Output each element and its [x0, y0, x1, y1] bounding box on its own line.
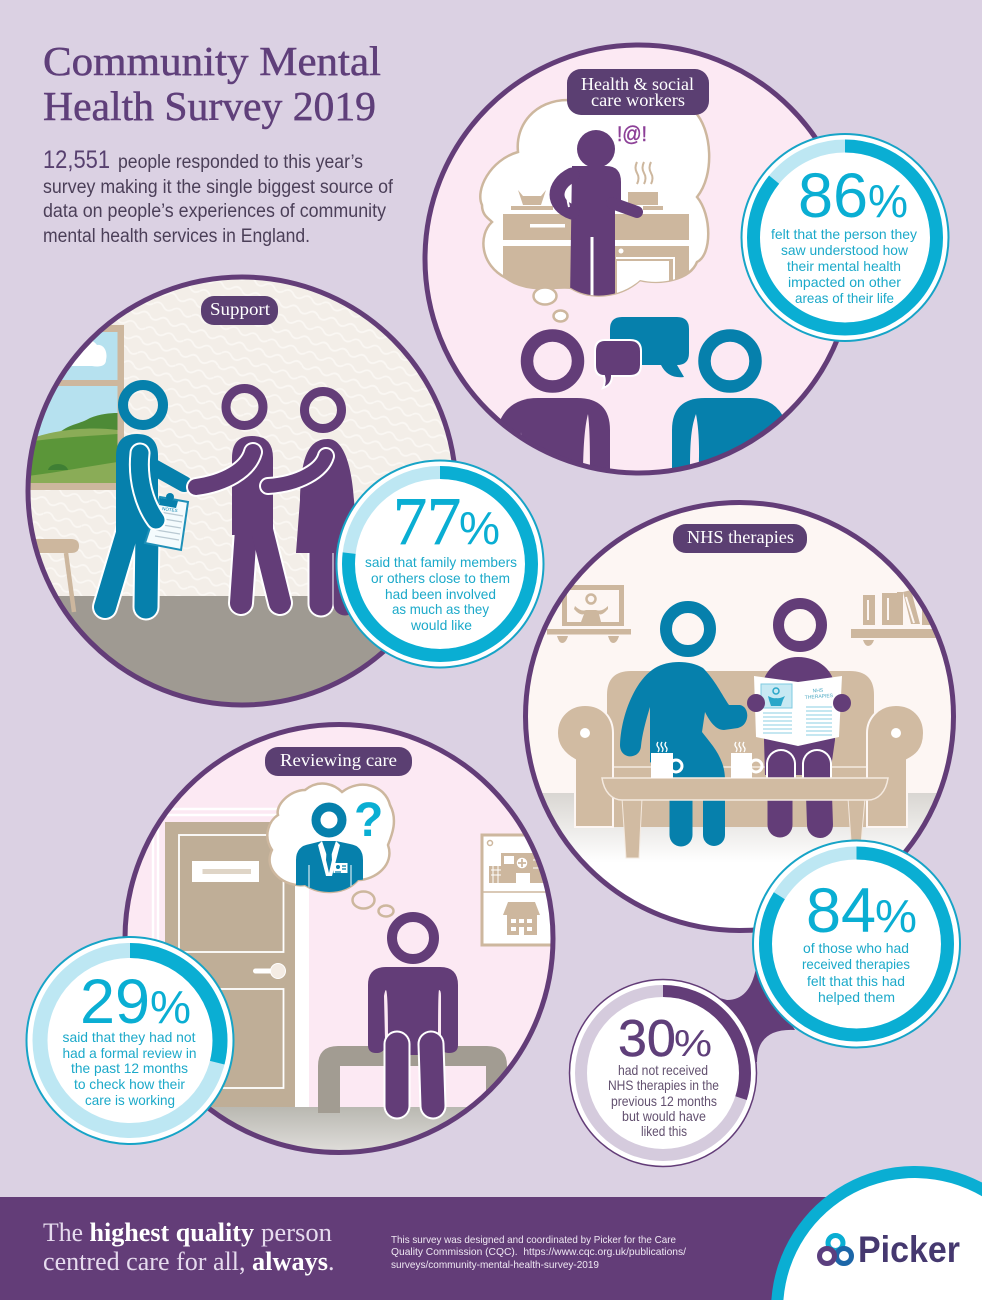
newspaper: NHS	[812, 688, 824, 694]
stat: 29%: to check how their	[74, 1076, 185, 1092]
stat: 77%: 77	[393, 483, 461, 559]
icon: speech bubbles	[595, 317, 689, 388]
heading: NHS therapies	[673, 524, 807, 553]
person at kitchen counter	[557, 130, 637, 302]
cup left	[651, 742, 682, 778]
tagline: highest quality	[90, 1218, 254, 1247]
stat: 77%: said that family members	[365, 554, 517, 570]
thought cloud	[480, 100, 709, 322]
tagline: always	[252, 1247, 328, 1276]
person: purple listener	[495, 336, 610, 480]
newspaper	[747, 676, 851, 746]
survey credit	[391, 1234, 686, 1271]
stat: 30%: NHS therapies in the	[608, 1077, 719, 1093]
heading: health and social care workers	[567, 69, 709, 115]
clipboard: NOTES	[162, 506, 178, 513]
tagline: centred care for all,	[43, 1247, 246, 1276]
heading: NHS therapies: NHS therapies	[687, 527, 794, 547]
stat: 77%: or others close to them	[371, 570, 510, 586]
stat: 86%: saw understood how	[781, 242, 909, 258]
stat: 86%: their mental health	[787, 258, 901, 274]
stat: 29%: 29	[80, 967, 150, 1037]
person: blue listener	[672, 336, 790, 480]
stat: 77%	[336, 460, 544, 668]
poster: local services	[482, 835, 554, 945]
stat: 86%: areas of their life	[795, 290, 894, 306]
stat: 29%: care is working	[85, 1092, 175, 1108]
stat: 77%: had been involved	[385, 586, 496, 602]
intro text: survey making it the single biggest source of	[43, 177, 394, 198]
stat: 84%: helped them	[818, 989, 895, 1005]
coffee table	[602, 778, 888, 858]
intro text: 12,551	[43, 146, 110, 174]
stool	[36, 539, 79, 612]
exclamation symbols: !@!	[617, 123, 647, 146]
stat: 84%: felt that this had	[807, 973, 905, 989]
heading: support: Support	[210, 299, 270, 319]
person: blue on sofa	[620, 607, 747, 835]
tagline: .	[328, 1247, 334, 1276]
window	[28, 325, 124, 490]
tagline: The	[43, 1218, 83, 1247]
survey credit: Quality Commission (CQC). https://www.cqc.org.uk/publications/	[391, 1246, 686, 1258]
door	[153, 809, 309, 1107]
stat: 30%	[570, 980, 756, 1166]
cup right	[731, 742, 762, 778]
title: Health Survey 2019	[43, 83, 376, 129]
stat: 86%: felt that the person they	[771, 226, 917, 242]
panel: NHS therapies	[525, 502, 954, 931]
intro text: people responded to this year’s	[118, 152, 363, 173]
thought cloud: clinician: ?	[354, 794, 383, 847]
connector between 84% and 30%	[712, 968, 795, 1062]
stat: 29%: said that they had not	[62, 1029, 196, 1045]
tagline: person	[261, 1218, 332, 1247]
stat: 77%: as much as they	[392, 601, 489, 617]
stat: 30%: but would have	[622, 1108, 706, 1124]
shelf with books	[851, 590, 941, 646]
icon: Picker rings	[820, 1236, 852, 1264]
person: purple relative	[268, 392, 358, 604]
bench	[318, 1046, 507, 1113]
heading: reviewing care: Reviewing care	[280, 750, 397, 770]
shelf with picture	[547, 585, 631, 643]
panel: reviewing care	[125, 724, 554, 1153]
stat: 30%: liked this	[641, 1123, 687, 1139]
stat: 84%: received therapies	[802, 956, 910, 972]
stat: 29%: the past 12 months	[71, 1060, 188, 1076]
survey credit: surveys/community-mental-health-survey-2019	[391, 1259, 599, 1271]
logo: Picker: Picker	[858, 1229, 960, 1270]
heading: reviewing care	[265, 747, 412, 776]
stat: 84%: of those who had	[803, 940, 909, 956]
clipboard	[145, 493, 188, 550]
person: seated patient	[368, 917, 458, 1106]
heading: support	[201, 296, 278, 325]
stat: 84%	[753, 840, 960, 1048]
heading: health and social care workers: care workers	[591, 90, 685, 110]
newspaper: THERAPIES	[805, 693, 834, 701]
thought cloud: clinician	[267, 784, 394, 916]
stat: 84%: 84	[806, 876, 876, 946]
person: blue clinician with clipboard	[105, 385, 188, 607]
person: purple carer shaking hands	[196, 388, 280, 603]
stat: 30%: %	[674, 1023, 712, 1065]
panel: support	[28, 277, 456, 705]
sofa	[557, 671, 924, 827]
heading: health and social care workers: Health & social	[581, 74, 694, 94]
person: purple reading	[762, 604, 835, 825]
stat: 30%: 30	[618, 1010, 676, 1068]
survey credit: This survey was designed and coordinated by Picker for the Care	[391, 1234, 676, 1246]
stat: 86%: 86	[798, 161, 868, 231]
stat: 77%: %	[459, 502, 500, 554]
title	[43, 38, 381, 129]
stat: 30%: previous 12 months	[611, 1093, 717, 1109]
stat: 86%: impacted on other	[788, 274, 901, 290]
footer band	[0, 1197, 982, 1300]
stat: 86%: %	[868, 175, 908, 227]
intro text: data on people’s experiences of community	[43, 201, 386, 222]
intro text	[43, 146, 394, 247]
title: Community Mental	[43, 38, 381, 84]
stat: 86%	[742, 134, 948, 341]
stat: 29%: had a formal review in	[62, 1045, 196, 1061]
logo: Picker	[771, 1166, 982, 1300]
stat: 29%	[26, 937, 234, 1144]
intro text: mental health services in England.	[43, 226, 310, 247]
stat: 77%: would like	[410, 617, 472, 633]
tagline	[43, 1218, 334, 1276]
stat: 30%: had not received	[618, 1062, 708, 1078]
stat: 84%: %	[875, 890, 917, 942]
panel: health and social care workers	[425, 45, 853, 480]
stat: 29%: %	[150, 981, 191, 1033]
